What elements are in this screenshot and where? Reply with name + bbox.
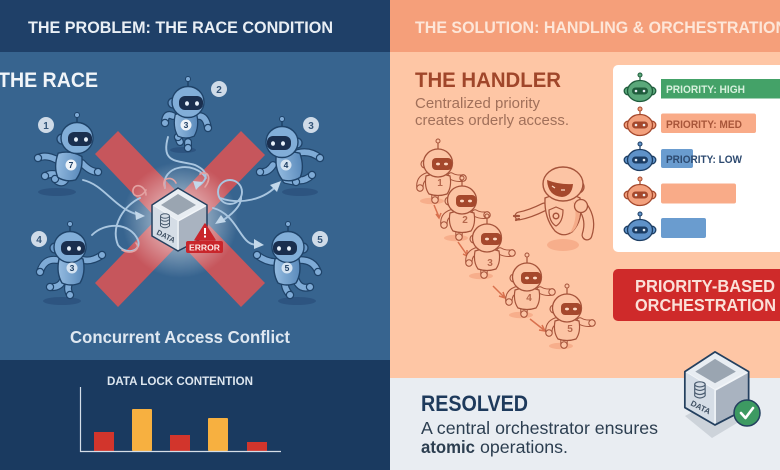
resolved data cube with check: DATA	[689, 399, 712, 416]
queued robot 5: 5	[567, 324, 573, 335]
robot 3: 4	[284, 160, 289, 170]
robot 1: 7	[69, 160, 74, 170]
panel: solution background	[390, 0, 780, 470]
priority row: medium: PRIORITY: MED	[666, 119, 742, 131]
resolved description: A central orchestrator ensures	[421, 418, 658, 438]
robot 1	[38, 112, 98, 196]
resolved description	[421, 418, 658, 457]
header: the problem	[0, 0, 390, 52]
handler description	[415, 96, 569, 129]
panel: problem background	[0, 0, 390, 470]
number badge 5	[312, 231, 328, 247]
queued robot 3: 3	[487, 258, 493, 269]
bar chart	[80, 387, 281, 452]
heading: the handler: THE HANDLER	[415, 69, 561, 92]
number badge 3: 3	[308, 121, 314, 132]
callout: priority-based orchestration	[613, 269, 780, 321]
handler robot	[514, 167, 589, 251]
handler description: creates orderly access.	[415, 113, 569, 129]
error label: ERROR	[189, 242, 220, 252]
resolved data cube with check	[685, 352, 760, 438]
number badge 1: 1	[43, 121, 49, 132]
number badge 2: 2	[216, 85, 222, 96]
error warning triangle	[195, 224, 215, 240]
robot 3	[260, 116, 320, 196]
glow around data cube	[122, 162, 238, 278]
robot 4	[40, 222, 102, 305]
queued robot 1	[420, 139, 463, 204]
heading: resolved: RESOLVED	[421, 391, 528, 416]
callout: priority-based orchestration: PRIORITY-BASED	[635, 276, 775, 296]
header: the solution	[390, 0, 780, 52]
panel: data lock contention chart	[0, 360, 390, 470]
robot 2	[165, 76, 208, 153]
data cube with error: DATA	[155, 228, 177, 245]
robot 2: 3	[184, 120, 189, 130]
queued robot 4: 4	[526, 293, 532, 304]
red cross mark	[95, 131, 265, 307]
check badge	[734, 400, 760, 426]
resolved description: operations.	[480, 437, 568, 457]
queued robot 4	[509, 253, 552, 318]
priority row: low	[624, 142, 743, 170]
robot 5	[257, 222, 318, 305]
robot 5: 5	[285, 263, 290, 273]
data cube with error	[152, 188, 223, 253]
queued robot 2	[444, 176, 487, 241]
number badge 4: 4	[36, 235, 42, 246]
priority row: high	[624, 73, 780, 102]
number badge 1	[38, 117, 54, 133]
conflicting swirl arrows	[83, 137, 281, 252]
panel: priority list	[613, 65, 780, 252]
number badge 4	[31, 231, 47, 247]
chart title: DATA LOCK CONTENTION	[107, 374, 253, 388]
resolved description: atomic	[421, 437, 475, 457]
priority row: high: PRIORITY: HIGH	[666, 84, 745, 96]
queued robot 5	[549, 284, 592, 349]
number badge 3	[303, 117, 319, 133]
queued robot 1: 1	[437, 178, 443, 189]
shield emblem	[549, 207, 563, 226]
robot 4: 3	[70, 263, 75, 273]
priority row: medium	[624, 107, 756, 136]
priority row: unlabeled blue	[624, 212, 706, 240]
caption: concurrent access conflict: Concurrent Access Conflict	[70, 327, 290, 347]
header: the problem: THE PROBLEM: THE RACE CONDITION	[28, 19, 333, 37]
queued robot 3	[469, 214, 512, 279]
heading: the race: THE RACE	[0, 69, 98, 92]
priority row: unlabeled orange	[624, 177, 736, 206]
handler description: Centralized priority	[415, 96, 541, 112]
queue arrows	[434, 205, 545, 331]
number badge 2	[211, 81, 227, 97]
number badge 5: 5	[317, 235, 323, 246]
priority row: low: PRIORITY: LOW	[666, 154, 743, 166]
queued robot 2: 2	[462, 215, 468, 226]
panel: resolved background	[390, 378, 780, 470]
